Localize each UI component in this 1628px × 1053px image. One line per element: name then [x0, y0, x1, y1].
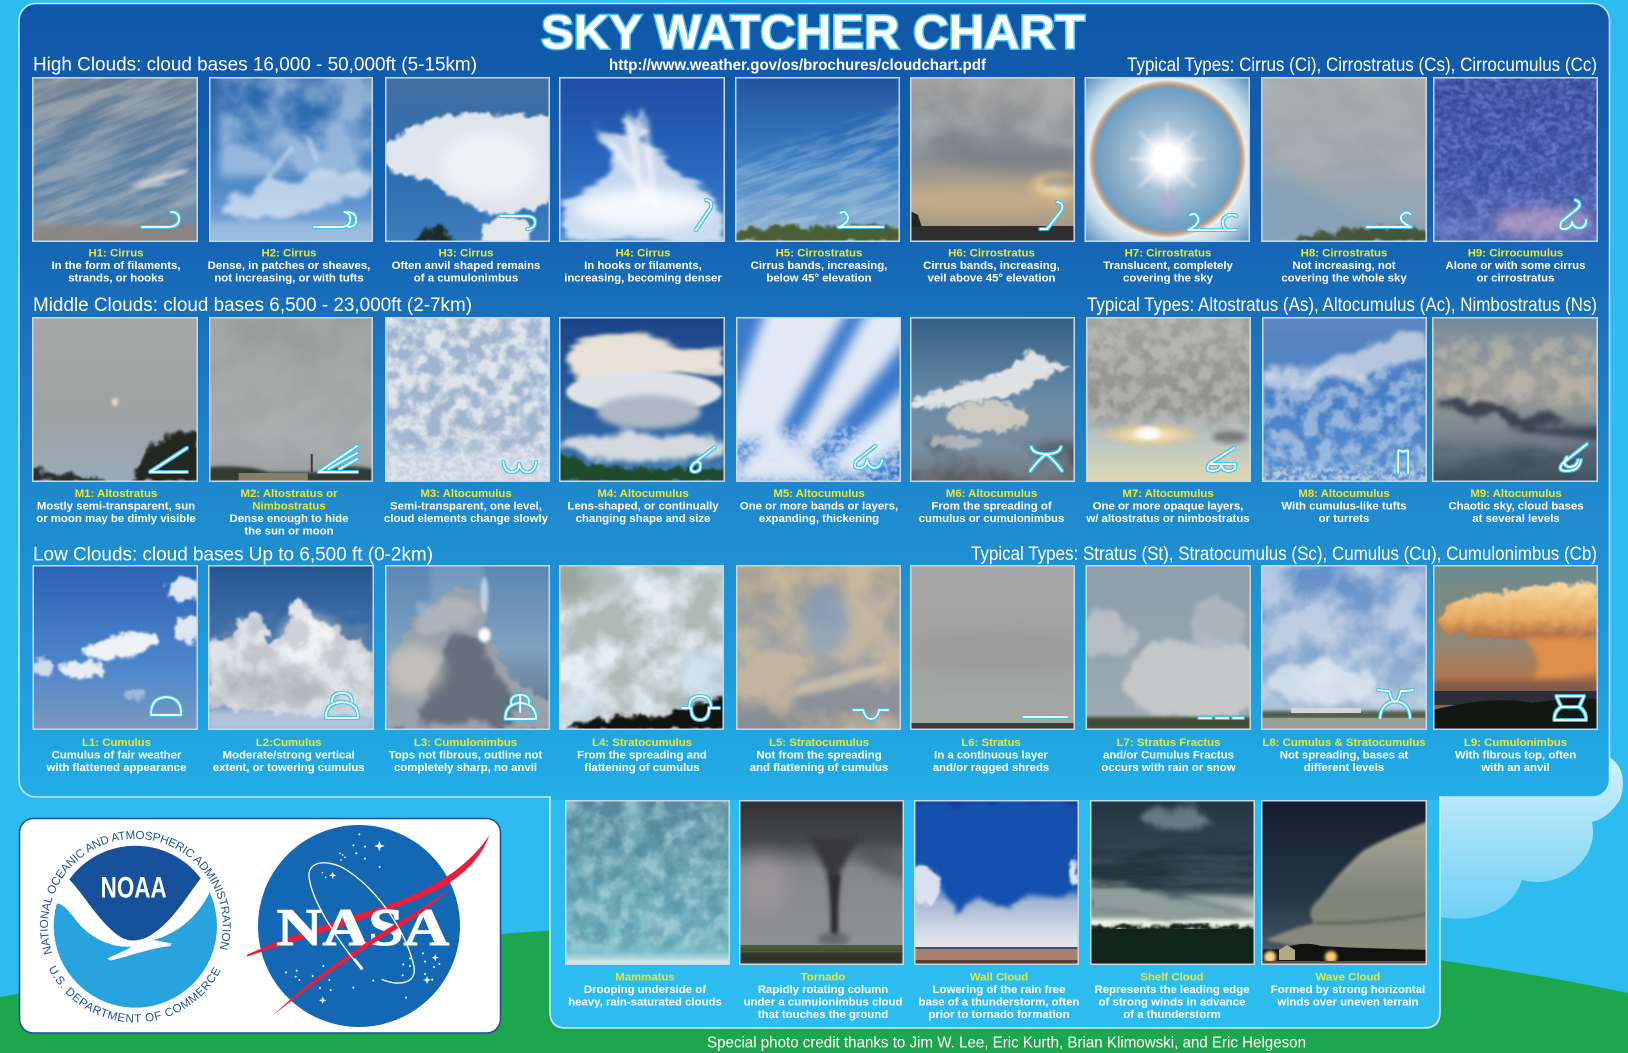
card: H3 Cirrus	[385, 77, 554, 284]
card: H7 Cirrostratus	[1084, 77, 1250, 284]
card: Wave Cloud	[1261, 800, 1437, 1008]
caption: M9: Chaotic sky, cloud bases	[1448, 500, 1584, 512]
caption: Wave Cloud: Wave Cloud	[1316, 972, 1380, 984]
heading: high clouds: High Clouds: cloud bases 16,000 - 50,000ft (5-15km)	[33, 54, 477, 76]
photo: L6	[910, 565, 1075, 730]
caption: L5: and flattening of cumulus	[750, 762, 888, 774]
photo: H6	[910, 77, 1075, 242]
photo: H3	[385, 77, 550, 242]
card: L4 Stratocumulus	[529, 550, 739, 774]
card: Wall Cloud	[912, 800, 1080, 1021]
logo: NOAA: NATIONAL OCEANIC AND ATMOSPHERIC ADMINISTRATION	[40, 830, 231, 955]
icon: L5 symbol	[853, 710, 888, 719]
caption: M8: With cumulus-like tufts	[1281, 500, 1407, 512]
icon: M4 symbol	[691, 447, 715, 472]
card: Shelf Cloud	[1075, 800, 1270, 1021]
photo: M4	[559, 317, 725, 482]
caption: M4: changing shape and size	[576, 513, 710, 525]
caption: M9: M9: Altocumulus	[1470, 488, 1562, 500]
caption: L9: with an anvil	[1480, 762, 1550, 774]
green hill	[0, 918, 1628, 1053]
card: M8 Altocumulus	[1247, 317, 1442, 525]
card: L7 Stratus Fractus	[1076, 565, 1270, 774]
caption: Wall Cloud: Lowering of the rain free	[933, 984, 1065, 996]
photo: H7	[1084, 77, 1250, 242]
icon: M9 symbol	[1560, 444, 1587, 471]
caption: M7: One or more opaque layers,	[1093, 500, 1243, 512]
caption: Tornado: Rapidly rotating column	[758, 984, 888, 996]
icon: M2 symbol	[319, 446, 357, 472]
source url: http://www.weather.gov/os/brochures/cloudchart.pdf	[609, 57, 987, 74]
caption: Tornado: Tornado	[801, 972, 845, 984]
caption: M2: M2: Altostratus or	[240, 488, 338, 500]
card: L8 Cumulus and Stratocumulus	[1246, 560, 1442, 774]
icon: L4 symbol	[682, 696, 719, 720]
caption: M5: One or more bands or layers,	[740, 500, 898, 512]
card: L1 Cumulus	[32, 565, 206, 774]
border: Wall Cloud	[914, 800, 1079, 965]
card: M6 Altocumulus	[895, 317, 1090, 525]
photo: M6	[910, 317, 1075, 482]
caption: H8: covering the whole sky	[1281, 272, 1407, 284]
caption: L4: From the spreading and	[577, 750, 707, 762]
card: H9 Cirrocumulus	[1418, 62, 1613, 284]
caption: M2: Dense enough to hide	[230, 513, 348, 525]
photo: L1	[32, 565, 198, 730]
caption: Wave Cloud: winds over uneven terrain	[1276, 996, 1419, 1008]
caption: H1: In the form of filaments,	[51, 260, 181, 272]
caption: L1: with flattened appearance	[46, 762, 186, 774]
icon: M5 symbol	[855, 446, 882, 468]
caption: M8: M8: Altocumulus	[1298, 488, 1390, 500]
logo: NASA: NASA	[277, 897, 450, 957]
caption: H1: strands, or hooks	[68, 272, 164, 284]
card: M9 Altocumulus	[1417, 317, 1613, 525]
caption: Wall Cloud: base of a thunderstorm, often	[919, 996, 1079, 1008]
caption: H7: H7: Cirrostratus	[1125, 248, 1211, 260]
icon: H5 symbol	[838, 212, 883, 227]
caption: L3: Tops not fibrous, outline not	[389, 750, 542, 762]
caption: H3: of a cumulonimbus	[414, 272, 518, 284]
photo: Tornado	[739, 800, 904, 965]
icon: L1 symbol	[151, 697, 181, 715]
caption: H2: not increasing, or with tufts	[214, 272, 364, 284]
icon: L3 symbol	[505, 695, 536, 719]
photo: L8	[1261, 565, 1427, 730]
caption: L3: L3: Cumulonimbus	[414, 737, 517, 749]
icon: L7 symbol	[1199, 717, 1243, 719]
photo: L3	[385, 565, 550, 730]
caption: L8: different levels	[1304, 762, 1384, 774]
caption: H4: H4: Cirrus	[615, 248, 671, 260]
caption: Shelf Cloud: Represents the leading edge	[1094, 984, 1250, 996]
photo: M2	[209, 317, 373, 482]
caption: H5: below 45° elevation	[766, 272, 872, 284]
caption: H4: In hooks or filaments,	[584, 260, 702, 272]
logo: NOAA: U.S. DEPARTMENT OF COMMERCE	[50, 965, 221, 1022]
card: L6 Stratus	[905, 565, 1094, 774]
caption: M5: expanding, thickening	[759, 513, 879, 525]
caption: M4: Lens-shaped, or continually	[567, 500, 719, 512]
caption: L2: Moderate/strong vertical	[223, 750, 355, 762]
caption: Shelf Cloud: of strong winds in advance	[1099, 996, 1245, 1008]
photo: Wave Cloud	[1261, 800, 1427, 965]
icon: L6 symbol	[1023, 716, 1067, 718]
card: M4 Altocumulus	[559, 317, 729, 525]
icon: H6 symbol	[1040, 202, 1062, 229]
caption: H8: H8: Cirrostratus	[1301, 248, 1387, 260]
caption: Shelf Cloud: of a thunderstorm	[1123, 1009, 1221, 1021]
caption: Mammatus: Drooping underside of	[584, 984, 706, 996]
caption: L3: completely sharp, no anvil	[394, 762, 537, 774]
caption: Mammatus: Mammatus	[615, 972, 675, 984]
card: H2 Cirrus	[208, 57, 387, 284]
caption: Shelf Cloud: Shelf Cloud	[1140, 972, 1204, 984]
caption: M3: M3: Altocumulus	[420, 488, 512, 500]
caption: L7: occurs with rain or snow	[1101, 762, 1236, 774]
caption: M1: M1: Altostratus	[75, 488, 157, 500]
caption: M3: cloud elements change slowly	[384, 513, 549, 525]
caption: H9: Alone or with some cirrus	[1446, 260, 1585, 272]
logo: NOAA: NOAA	[101, 872, 167, 905]
card: Mammatus	[550, 785, 745, 1008]
card: H5 Cirrostratus	[686, 77, 953, 284]
photo: Wall Cloud	[914, 800, 1079, 965]
patch joining lower panel to main panel	[551, 792, 1439, 800]
caption: L8: L8: Cumulus & Stratocumulus	[1262, 737, 1426, 749]
caption: L1: L1: Cumulus	[82, 737, 151, 749]
caption: L8: Not spreading, bases at	[1280, 750, 1408, 762]
card: M1 Altostratus	[32, 317, 198, 525]
caption: L7: and/or Cumulus Fractus	[1103, 750, 1234, 762]
logo panel	[20, 818, 500, 1033]
photo: L2	[208, 565, 374, 730]
photo: H2	[209, 77, 373, 242]
icon: L8 symbol	[1378, 690, 1413, 718]
caption: M9: at several levels	[1472, 513, 1560, 525]
caption: Wall Cloud: Wall Cloud	[970, 972, 1028, 984]
icon: H7 symbol	[1188, 214, 1236, 230]
icon: H2 symbol	[314, 212, 356, 227]
icon: M8 symbol	[1398, 450, 1408, 473]
photo: L9	[1433, 565, 1598, 730]
caption: H6: veil above 45° elevation	[927, 272, 1056, 284]
card: M7 Altocumulus	[1071, 302, 1266, 525]
card: H4 Cirrus	[559, 77, 725, 284]
photo: L5	[736, 565, 901, 730]
card: H8 Cirrostratus	[1241, 57, 1447, 284]
caption: Wall Cloud: prior to tornado formation	[928, 1009, 1070, 1021]
caption: M6: cumulus or cumulonimbus	[919, 513, 1064, 525]
photo: Shelf Cloud	[1090, 800, 1255, 965]
photo: H4	[559, 77, 725, 242]
caption: M5: M5: Altocumulus	[773, 488, 865, 500]
icon: M7 symbol	[1207, 448, 1235, 471]
caption: H9: or cirrostratus	[1477, 272, 1554, 284]
photo: M5	[736, 317, 901, 482]
caption: H6: H6: Cirrostratus	[948, 248, 1035, 260]
caption: H5: Cirrus bands, increasing,	[751, 260, 887, 272]
caption: H7: Translucent, completely	[1103, 260, 1234, 272]
photo: M1	[32, 317, 198, 482]
icon: H1 symbol	[142, 212, 179, 227]
caption: L2: extent, or towering cumulus	[213, 762, 365, 774]
card: Tornado	[738, 800, 919, 1021]
caption: M3: Semi-transparent, one level,	[390, 500, 542, 512]
card: L9 Cumulonimbus	[1433, 565, 1608, 774]
photo: M9	[1432, 317, 1598, 482]
heading: low clouds: Low Clouds: cloud bases Up to 6,500 ft (0-2km)	[33, 544, 433, 566]
caption: H1: H1: Cirrus	[88, 248, 144, 260]
border: Wave Cloud	[1261, 800, 1427, 965]
icon: H8 symbol	[1367, 212, 1411, 227]
caption: Tornado: that touches the ground	[758, 1009, 888, 1021]
caption: M7: M7: Altocumulus	[1122, 488, 1214, 500]
border: Tornado	[739, 800, 904, 965]
logo: NASA	[246, 825, 490, 1027]
caption: M2: the sun or moon	[244, 526, 334, 538]
caption: H6: Cirrus bands, increasing,	[923, 260, 1060, 272]
caption: M4: M4: Altocumulus	[597, 488, 689, 500]
photo: M7	[1086, 317, 1251, 482]
photo: L4	[559, 565, 724, 730]
card: L3 Cumulonimbus	[385, 565, 550, 774]
icon: L2 symbol	[326, 693, 358, 718]
caption: H5: H5: Cirrostratus	[776, 248, 862, 260]
photo: M3	[385, 317, 550, 482]
caption: L4: L4: Stratocumulus	[592, 737, 692, 749]
caption: Tornado: under a cumulonimbus cloud	[744, 996, 902, 1008]
border: Mammatus	[565, 800, 730, 965]
caption: M6: M6: Altocumulus	[946, 488, 1037, 500]
caption: L6: and/or ragged shreds	[933, 762, 1049, 774]
icon: M1 symbol	[150, 448, 187, 472]
caption: M1: or moon may be dimly visible	[36, 513, 196, 525]
icon: M6 symbol	[1030, 447, 1062, 471]
card: M3 Altocumulus	[370, 302, 565, 525]
caption: M7: w/ altostratus or nimbostratus	[1085, 513, 1250, 525]
icon: H3 symbol	[500, 216, 535, 229]
photo: M8	[1262, 317, 1427, 482]
photo: L7	[1086, 565, 1251, 730]
caption: L4: flattening of cumulus	[584, 762, 700, 774]
photo: H8	[1261, 77, 1427, 242]
icon: H4 symbol	[696, 200, 711, 230]
caption: M2: Nimbostratus	[252, 500, 326, 512]
photo: H5	[735, 77, 900, 242]
photo: H9	[1433, 77, 1598, 242]
caption: L5: Not from the spreading	[756, 750, 882, 762]
caption: H9: H9: Cirrocumulus	[1468, 248, 1563, 260]
lower severe clouds panel	[550, 797, 1440, 1028]
photo: Mammatus	[565, 800, 730, 965]
logo: NOAA	[40, 830, 231, 1022]
card: L5 Stratocumulus	[647, 491, 996, 807]
caption: L9: With fibrous top, often	[1455, 750, 1576, 762]
caption: M8: or turrets	[1319, 513, 1369, 525]
caption: H3: H3: Cirrus	[438, 248, 494, 260]
caption: L5: L5: Stratocumulus	[769, 737, 869, 749]
photo: H1	[32, 77, 198, 242]
icon: L9 symbol	[1554, 696, 1586, 720]
background cloud	[1430, 755, 1623, 919]
icon: M3 symbol	[503, 462, 536, 472]
caption: Wave Cloud: Formed by strong horizontal	[1271, 984, 1425, 996]
card: M2 Altostratus or Nimbostratus	[194, 302, 388, 538]
title: SKY WATCHER CHART	[541, 6, 1085, 60]
caption: H2: H2: Cirrus	[261, 248, 317, 260]
card: H6 Cirrostratus	[890, 62, 1090, 284]
main panel	[19, 4, 1610, 797]
caption: H2: Dense, in patches or sheaves,	[208, 260, 370, 272]
caption: Mammatus: heavy, rain-saturated clouds	[568, 996, 722, 1008]
border: Shelf Cloud	[1090, 800, 1255, 965]
caption: L7: L7: Stratus Fractus	[1117, 737, 1220, 749]
caption: L2: L2:Cumulus	[256, 737, 322, 749]
card: M5 Altocumulus	[716, 297, 925, 525]
photo credit: Special photo credit thanks to Jim W. Lee, Eric Kurth, Brian Klimowski, and Eric Helgeson	[707, 1034, 1306, 1052]
caption: L9: L9: Cumulonimbus	[1464, 737, 1567, 749]
card: H1 Cirrus	[0, 5, 292, 284]
caption: H7: covering the sky	[1123, 272, 1214, 284]
caption: L1: Cumulus of fair weather	[52, 750, 182, 762]
icon: H9 symbol	[1560, 200, 1586, 229]
caption: M6: From the spreading of	[931, 500, 1052, 512]
caption: H4: increasing, becoming denser	[564, 272, 722, 284]
caption: H8: Not increasing, not	[1292, 260, 1396, 272]
card: L2 Cumulus	[193, 565, 389, 774]
caption: M1: Mostly semi-transparent, sun	[37, 500, 195, 512]
caption: L6: In a continuous layer	[934, 750, 1049, 762]
caption: H3: Often anvil shaped remains	[392, 260, 540, 272]
heading: middle clouds: Middle Clouds: cloud bases 6,500 - 23,000ft (2-7km)	[33, 294, 472, 316]
caption: L6: L6: Stratus	[961, 737, 1021, 749]
